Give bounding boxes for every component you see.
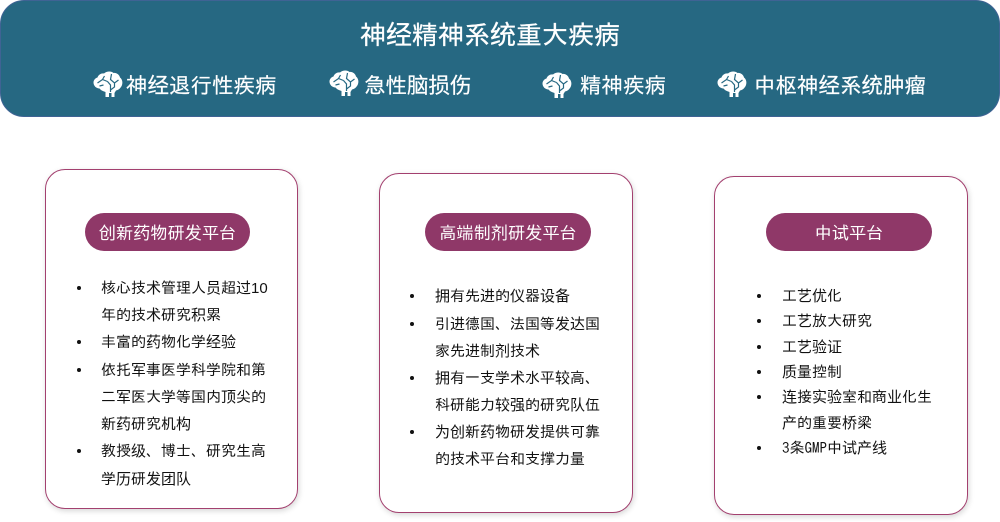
bullet list: 引进德国、法国等发达国 xyxy=(435,316,600,331)
label: 中枢神经系统肿瘤 xyxy=(754,74,926,96)
heading pill xyxy=(425,213,591,251)
heading pill: 高端制剂研发平台 xyxy=(439,225,577,242)
label: 急性脑损伤 xyxy=(364,74,472,96)
heading pill xyxy=(766,213,932,251)
bullet list xyxy=(77,280,268,486)
bullet list: 产的重要桥梁 xyxy=(782,415,872,430)
bullet list: 连接实验室和商业化生 xyxy=(782,389,932,404)
bullet list: 拥有一支学术水平较高、 xyxy=(435,370,600,385)
bullet list: 丰富的药物化学经验 xyxy=(101,334,236,349)
panel: innovative drug R&D platform xyxy=(45,169,298,509)
category: acute brain injury xyxy=(330,70,472,96)
heading pill: 中试平台 xyxy=(815,225,883,242)
title: 神经精神系统重大疾病 xyxy=(360,22,620,48)
bullet list: 工艺优化 xyxy=(782,288,842,303)
icon: brain xyxy=(542,72,572,98)
bullet list: 教授级、博士、研究生高 xyxy=(101,443,266,458)
bullet list: 年的技术研究积累 xyxy=(101,307,221,322)
bullet list: 学历研发团队 xyxy=(101,471,191,486)
bullet list xyxy=(757,288,932,455)
bullet list xyxy=(410,288,600,466)
bullet list: 为创新药物研发提供可靠 xyxy=(435,424,600,439)
icon: brain xyxy=(330,70,358,96)
bullet list: 新药研究机构 xyxy=(101,416,191,431)
bullet list: 的技术平台和支撑力量 xyxy=(435,451,585,466)
heading pill xyxy=(85,213,250,251)
banner xyxy=(0,0,1000,117)
bullet list: 家先进制剂技术 xyxy=(435,343,540,358)
bullet list: 3条GMP中试产线 xyxy=(782,440,887,455)
bullet list: 二军医大学等国内顶尖的 xyxy=(101,389,266,404)
bullet list: 质量控制 xyxy=(782,364,842,379)
bullet list: 科研能力较强的研究队伍 xyxy=(435,397,600,412)
bullet list: 工艺验证 xyxy=(782,339,842,354)
panel: high-end formulation R&D platform xyxy=(379,173,633,513)
label: 神经退行性疾病 xyxy=(126,74,277,96)
category: psychiatric diseases xyxy=(542,72,666,98)
bullet list: 工艺放大研究 xyxy=(782,313,872,328)
bullet list: 拥有先进的仪器设备 xyxy=(435,288,570,303)
label: 精神疾病 xyxy=(580,74,666,96)
panel: pilot platform xyxy=(714,176,968,515)
category: neurodegenerative diseases xyxy=(94,72,277,97)
bullet list: 核心技术管理人员超过10 xyxy=(101,280,268,297)
bullet list: 依托军事医学科学院和第 xyxy=(101,362,266,377)
icon: brain xyxy=(94,72,122,97)
icon: brain xyxy=(718,72,746,97)
category: CNS tumors xyxy=(718,72,926,97)
heading pill: 创新药物研发平台 xyxy=(99,225,236,242)
